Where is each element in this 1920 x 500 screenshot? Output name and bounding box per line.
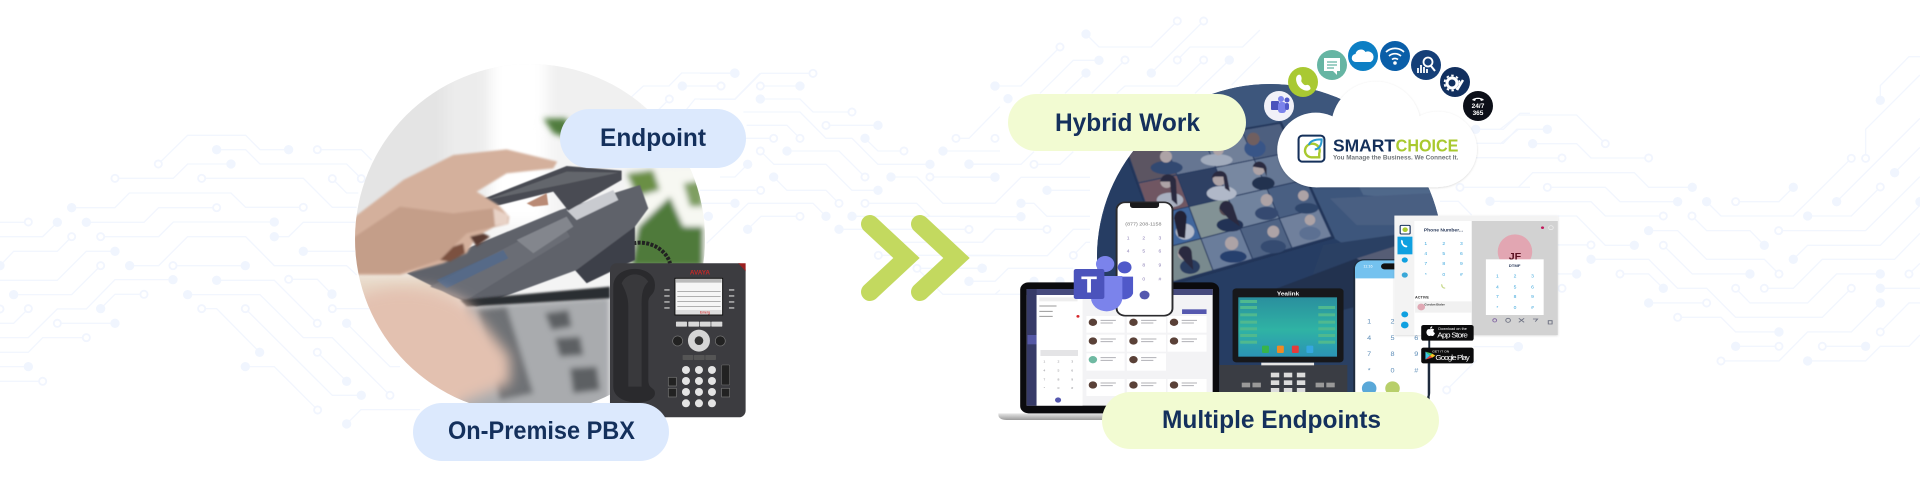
handset cord <box>633 243 670 263</box>
panel: desktop softphone app: 123 <box>1496 274 1534 279</box>
cloud: Smart Choice logo: CHOICE <box>1396 136 1459 156</box>
icon: teams <box>1264 91 1294 121</box>
panel: desktop softphone app: Gordon Bixler <box>1424 303 1446 306</box>
arrow: double chevron <box>870 224 956 292</box>
pill: Multiple Endpoints <box>1102 392 1439 449</box>
video tiles <box>1127 123 1332 282</box>
panel: on-premise photo of hands on a desk phone <box>355 65 705 403</box>
badge: Google Play: Google Play <box>1435 353 1470 362</box>
icon: smartphone dialer: *0# <box>1127 277 1162 282</box>
icon: wifi <box>1380 41 1410 71</box>
panel: desktop softphone app: 456 <box>1496 285 1534 289</box>
icon: cloud <box>1348 41 1378 71</box>
icon: analytics search <box>1411 50 1441 80</box>
icon: chat <box>1317 50 1347 80</box>
icon: Yealink desk phone: Yealink <box>1277 291 1300 298</box>
icon: smartphone dialer: 123 <box>1127 236 1162 240</box>
pill: Hybrid Work: Hybrid Work <box>1055 109 1200 137</box>
panel: desktop softphone app: Phone Number... <box>1424 228 1463 233</box>
cloud: Smart Choice logo: SMART <box>1333 136 1395 156</box>
icon: smartphone dialer <box>1117 202 1172 316</box>
icon: phone <box>1288 67 1318 97</box>
icon: laptop with Teams client: 123 <box>1043 360 1073 364</box>
pill: On-Premise PBX: On-Premise PBX <box>448 417 635 445</box>
icon: Avaya desk phone <box>610 263 746 417</box>
badge: Google Play: GET IT ON <box>1432 350 1450 353</box>
icon: mobile softphone: 789 <box>1367 351 1418 358</box>
panel: desktop softphone app: JF <box>1509 252 1521 262</box>
pill: Endpoint: Endpoint <box>600 124 707 152</box>
tile people <box>1151 140 1321 274</box>
cloud: Smart Choice logo <box>1277 82 1477 187</box>
pill: Endpoint <box>560 109 746 168</box>
panel: desktop softphone app: 789 <box>1424 261 1463 266</box>
panel: desktop softphone app: *0# <box>1496 305 1534 310</box>
icon: smartphone dialer: 456 <box>1127 249 1162 254</box>
icon: mobile softphone <box>1354 260 1430 402</box>
icon: smartphone dialer: (877) 208-1158 <box>1125 222 1162 228</box>
badge: App Store: App Store <box>1437 331 1469 340</box>
icon: smartphone dialer: 789 <box>1127 263 1162 268</box>
panel: hybrid work video-call photo <box>1097 84 1438 392</box>
badge: App Store <box>1421 325 1474 341</box>
icon: 24/7 support: 365 <box>1473 110 1484 117</box>
pill: Hybrid Work <box>1008 94 1246 151</box>
panel: desktop softphone app: ACTIVE <box>1415 296 1430 300</box>
badge: Google Play <box>1421 348 1474 363</box>
icon: mobile softphone: 456 <box>1367 335 1418 342</box>
icon: laptop with Teams client: 789 <box>1043 378 1073 381</box>
panel: desktop softphone app: 456 <box>1424 251 1463 256</box>
icon: laptop with Teams client <box>998 282 1236 420</box>
panel: desktop softphone app <box>1394 216 1558 335</box>
panel: desktop softphone app: DTMF <box>1509 263 1521 268</box>
panel: desktop softphone app: *0# <box>1425 272 1463 277</box>
icon: laptop with Teams client: *0# <box>1044 386 1073 390</box>
icon: mobile softphone: *0# <box>1368 368 1418 374</box>
icon: mobile softphone: 11:16 <box>1363 265 1373 269</box>
icon: Microsoft Teams logo <box>1074 256 1133 311</box>
icon: logo mark <box>1299 136 1324 162</box>
cloud: Smart Choice logo: You Manage the Business. We Connect It. <box>1333 155 1459 162</box>
badge: App Store: Download on the <box>1438 327 1467 331</box>
icon: laptop with Teams client: 456 <box>1043 369 1073 373</box>
pill: Multiple Endpoints: Multiple Endpoints <box>1162 406 1381 434</box>
icon: 24/7 support: 24/7 <box>1472 103 1485 110</box>
panel: desktop softphone app: 789 <box>1496 294 1534 299</box>
icon: mobile softphone: 123 <box>1367 319 1418 325</box>
icon: Avaya desk phone: AVAYA <box>690 269 710 276</box>
keyboard <box>453 297 610 410</box>
pill: On-Premise PBX <box>413 403 669 461</box>
icon: Avaya desk phone: Emerg <box>700 311 710 315</box>
icon: 24/7 support <box>1463 91 1493 121</box>
panel: desktop softphone app: 123 <box>1424 241 1463 246</box>
panel: multiple endpoint devices <box>998 202 1558 420</box>
icon: Yealink desk phone <box>1219 288 1347 400</box>
icon: settings <box>1440 67 1470 97</box>
navy tint overlay <box>1128 84 1438 310</box>
icon row: services arc <box>1264 41 1493 121</box>
icon: Microsoft Teams logo: T <box>1081 273 1097 298</box>
